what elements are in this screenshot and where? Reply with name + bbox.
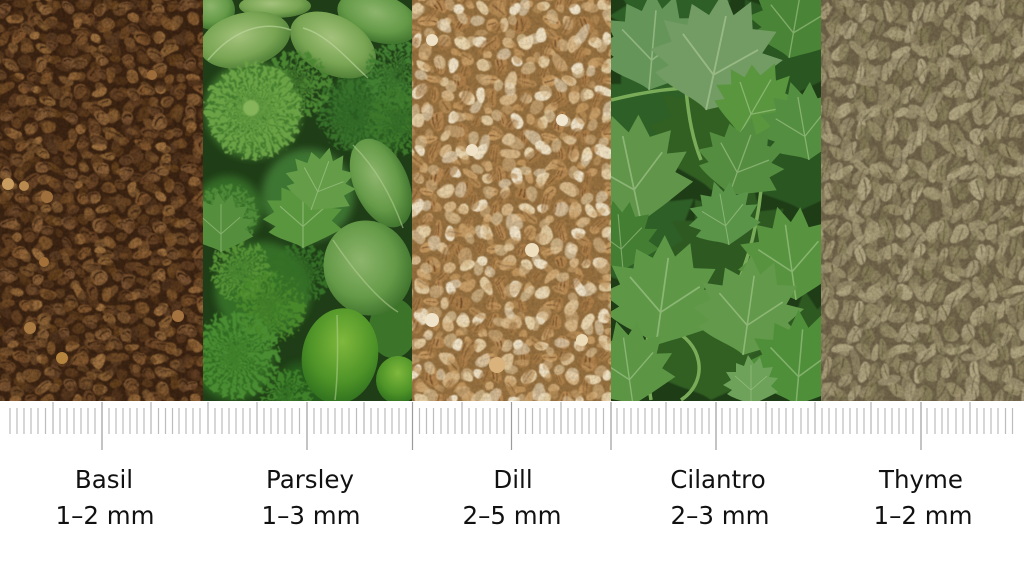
label: basil: Basil: [75, 465, 133, 494]
panel: dill seeds: [412, 0, 611, 401]
parsley clumps: [209, 54, 416, 406]
panel: parsley leaves: [203, 0, 412, 401]
label: thyme: 1–2 mm: [874, 501, 972, 530]
label: thyme: Thyme: [878, 465, 963, 494]
label: dill: 2–5 mm: [463, 501, 561, 530]
label: parsley: Parsley: [266, 465, 354, 494]
label: cilantro: 2–3 mm: [671, 501, 769, 530]
label: parsley: 1–3 mm: [262, 501, 360, 530]
long ticks: [102, 402, 921, 450]
minor ticks: [10, 408, 1012, 434]
panel: basil seeds: [0, 0, 203, 401]
backing foliage: [193, 62, 417, 418]
label: cilantro: [670, 465, 769, 530]
basil leaves upper: [191, 0, 425, 92]
label: thyme: [874, 465, 972, 530]
label: dill: [463, 465, 561, 530]
medium ticks: [53, 402, 970, 434]
ruler: [10, 402, 1012, 450]
basil leaves lower: [337, 129, 425, 237]
label: parsley: [262, 465, 360, 530]
label: basil: [56, 465, 154, 530]
label: basil: 1–2 mm: [56, 501, 154, 530]
label: cilantro: Cilantro: [670, 465, 766, 494]
panel: cilantro leaves: [611, 0, 821, 401]
label: dill: Dill: [493, 465, 533, 494]
backing leaves: [574, 0, 870, 400]
panel: thyme seeds: [821, 0, 1024, 401]
